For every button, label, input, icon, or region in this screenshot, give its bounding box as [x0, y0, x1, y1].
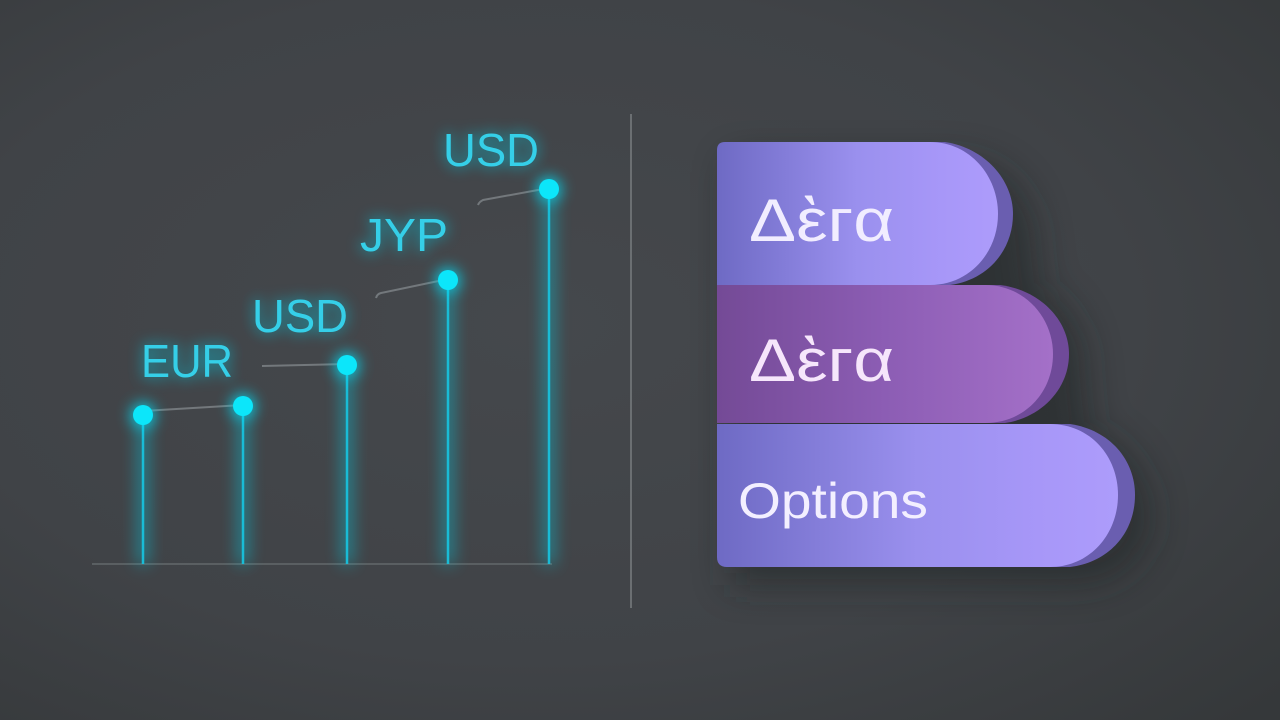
tab 3 side — [1020, 424, 1135, 567]
tab 2 text: Δὲгα — [749, 327, 894, 394]
tab 3: Options — [717, 424, 1135, 567]
label glow: USD — [252, 290, 348, 342]
stem glow — [143, 189, 549, 564]
tab 1 text: Δὲгα — [749, 187, 894, 254]
tab 1: Δέτα — [717, 142, 1013, 285]
tab shadow — [730, 160, 1151, 585]
label glow: JYP — [360, 209, 448, 261]
tab 2 side — [960, 285, 1069, 423]
label glow — [141, 124, 539, 387]
label: JYP: JYP — [360, 209, 448, 261]
chart: currency line chart — [92, 124, 562, 564]
tab 3 text: Options — [738, 473, 928, 529]
stems — [143, 189, 549, 564]
tab 1 side — [900, 142, 1013, 285]
connector lines — [143, 188, 549, 411]
tab 1 face — [717, 142, 998, 285]
point glow — [130, 176, 562, 428]
label: EUR: EUR — [141, 335, 233, 387]
tab 3 face — [717, 424, 1118, 567]
chart baseline — [92, 563, 552, 565]
data points — [133, 179, 559, 425]
label: USD: USD — [252, 290, 348, 342]
tab 2 face — [717, 285, 1053, 423]
label: USD top: USD — [443, 124, 539, 176]
vertical divider — [630, 114, 632, 608]
label glow: EUR — [141, 335, 233, 387]
tab 2: Δέτα — [717, 285, 1069, 423]
panel: stacked tabs — [717, 142, 1151, 585]
label glow: USD — [443, 124, 539, 176]
